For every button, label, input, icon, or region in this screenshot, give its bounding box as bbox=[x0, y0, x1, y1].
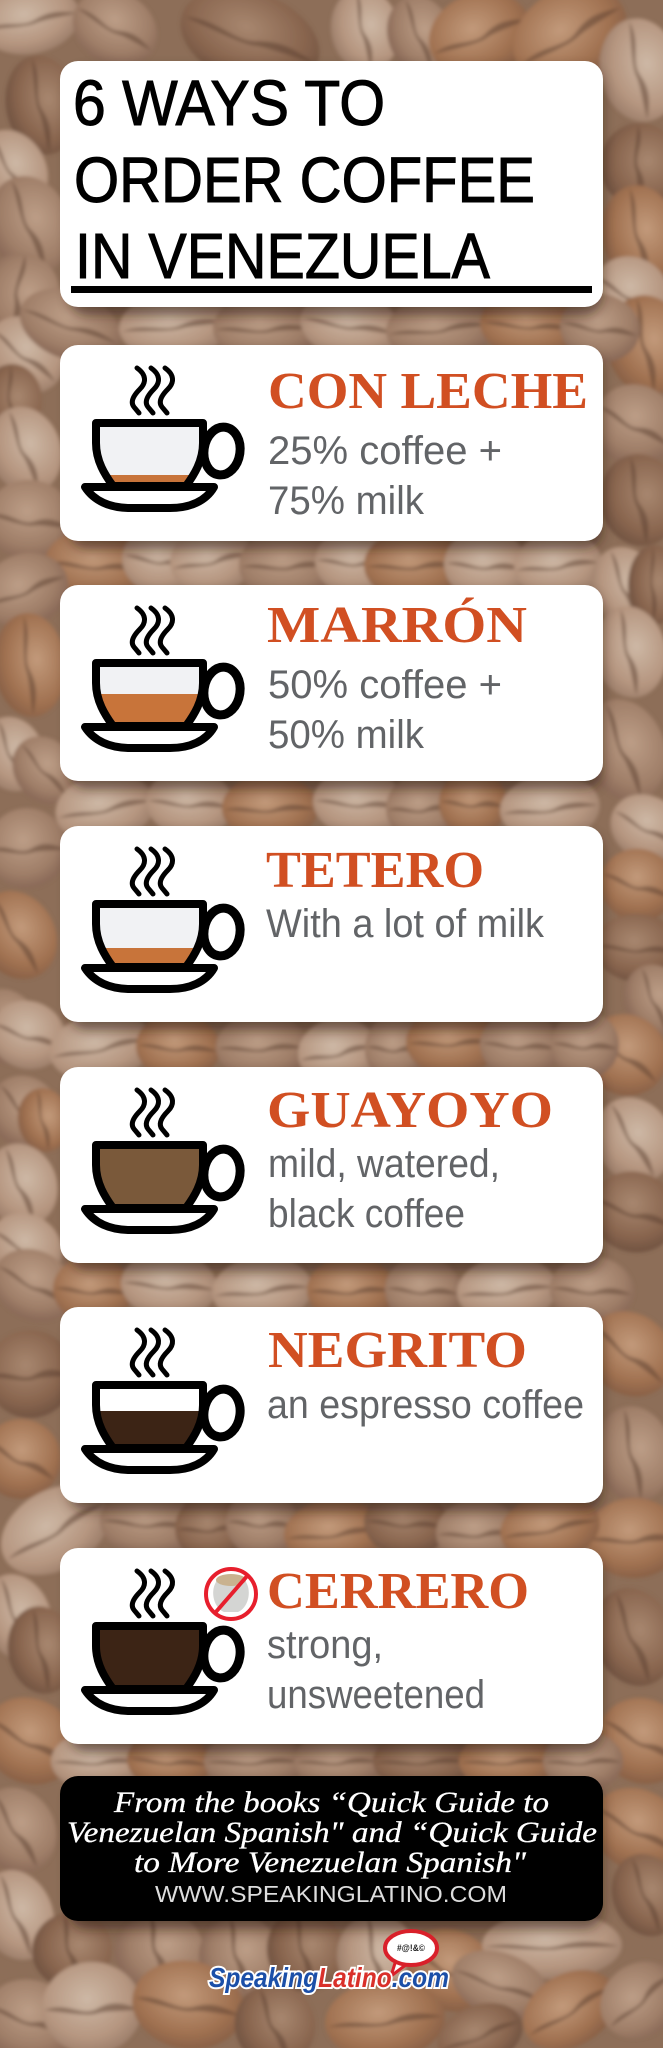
credit text: Venezuelan Spanish" and “Quick Guide bbox=[67, 1816, 597, 1849]
icon: no sugar bbox=[206, 1569, 256, 1619]
heading: negrito: NEGRITO bbox=[268, 1322, 527, 1379]
credit text bbox=[67, 1786, 597, 1907]
title panel bbox=[60, 61, 603, 315]
panel: tetero bbox=[60, 826, 603, 1030]
panel: con leche bbox=[60, 345, 603, 549]
description: negrito: an espresso coffee bbox=[267, 1383, 584, 1427]
description: guayoyo: mild, watered, bbox=[268, 1142, 500, 1186]
icon: cup guayoyo bbox=[85, 1090, 243, 1230]
panel: guayoyo bbox=[60, 1067, 603, 1271]
description: con leche: 75% milk bbox=[268, 479, 425, 523]
icon: cup negrito bbox=[85, 1330, 243, 1470]
heading: cerrero: CERRERO bbox=[267, 1563, 529, 1620]
description: marron: 50% milk bbox=[268, 713, 425, 757]
icon: cup con leche bbox=[85, 368, 243, 508]
heading: marron: MARRÓN bbox=[267, 596, 527, 654]
panel: cerrero bbox=[60, 1548, 603, 1752]
description: marron bbox=[268, 663, 502, 757]
icon: cup cerrero bbox=[85, 1571, 243, 1711]
description: con leche bbox=[268, 429, 502, 523]
credit text: From the books “Quick Guide to bbox=[113, 1786, 549, 1819]
description: cerrero: strong, bbox=[267, 1623, 383, 1667]
heading: con leche: CON LECHE bbox=[268, 363, 588, 420]
description: guayoyo: black coffee bbox=[268, 1192, 465, 1236]
panel: marron bbox=[60, 585, 603, 789]
description: marron: 50% coffee + bbox=[268, 663, 502, 707]
description: cerrero bbox=[267, 1623, 485, 1717]
heading: guayoyo: GUAYOYO bbox=[267, 1082, 553, 1139]
heading: tetero: TETERO bbox=[266, 842, 484, 899]
icon: cup marron bbox=[85, 608, 243, 748]
logo: SpeakingLatino.com: #@!&© bbox=[397, 1943, 425, 1953]
description: cerrero: unsweetened bbox=[267, 1673, 485, 1717]
panel: book credit bbox=[60, 1776, 603, 1929]
credit text: WWW.SPEAKINGLATINO.COM bbox=[155, 1881, 507, 1907]
credit text: to More Venezuelan Spanish" bbox=[134, 1846, 526, 1879]
description: tetero: With a lot of milk bbox=[266, 902, 545, 946]
title bbox=[71, 67, 592, 293]
logo: SpeakingLatino.com bbox=[209, 1931, 449, 1993]
title: IN VENEZUELA bbox=[75, 220, 490, 292]
title: 6 WAYS TO bbox=[73, 67, 385, 139]
icon: cup tetero bbox=[85, 849, 243, 989]
description: guayoyo bbox=[268, 1142, 500, 1236]
logo: SpeakingLatino.com: SpeakingLatino.com bbox=[209, 1962, 449, 1993]
panel: negrito bbox=[60, 1307, 603, 1511]
description: con leche: 25% coffee + bbox=[268, 429, 502, 473]
title: ORDER COFFEE bbox=[74, 144, 535, 216]
